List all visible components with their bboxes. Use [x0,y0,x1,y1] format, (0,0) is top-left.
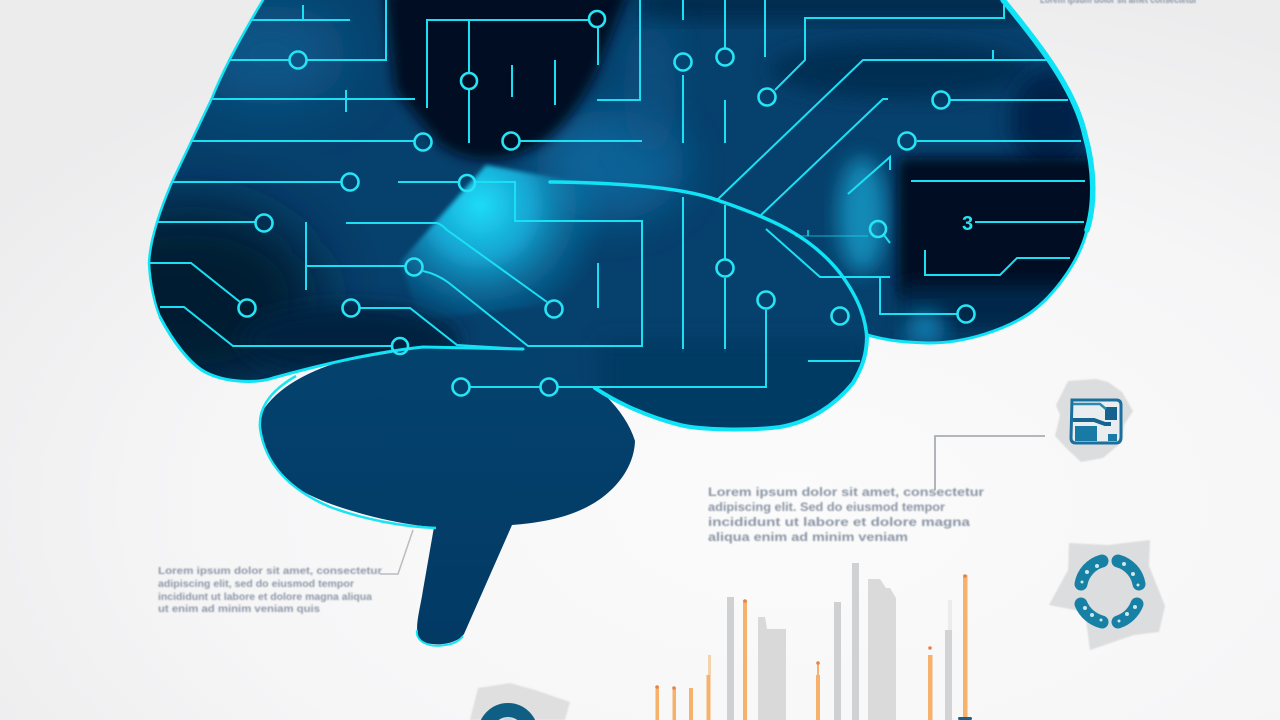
bar tips [655,574,967,690]
left caption text [158,565,382,615]
right caption text [708,487,985,544]
node glyph: 3 [962,213,973,235]
connector: right caption [935,436,1045,490]
cerebellum and brain stem [261,347,635,644]
left caption text: adipiscing elit, sed do eiusmod tempor [158,578,354,590]
right caption text: aliqua enim ad minim veniam [708,532,908,544]
dark base marker [958,717,972,720]
left caption text: incididunt ut labore et dolore magna aliqua [158,591,372,603]
left caption text: ut enim ad minim veniam quis [158,603,320,615]
connector: left caption [380,530,413,574]
right caption text: Lorem ipsum dolor sit amet, consectetur [708,487,985,499]
right caption text: adipiscing elit. Sed do eiusmod tempor [708,502,946,514]
grey bars [727,563,952,720]
left caption text: Lorem ipsum dolor sit amet, consectetur [158,565,382,577]
bar chart [655,563,972,720]
circuit traces [149,0,1085,387]
cerebrum outline [149,0,1093,429]
icon: circuit chip [1055,379,1133,462]
right caption text: incididunt ut labore et dolore magna [708,517,971,529]
orange bars [656,575,968,720]
cluster highlights [1080,562,1140,622]
icon: bottom donut [470,683,570,720]
cerebrum body [150,0,1090,428]
circuit nodes [238,11,974,396]
cluster ring arcs [1081,561,1139,622]
icon: ring of clusters [1049,540,1165,650]
cerebellum and stem glow outline [260,376,463,646]
brain illustration [60,0,1108,646]
